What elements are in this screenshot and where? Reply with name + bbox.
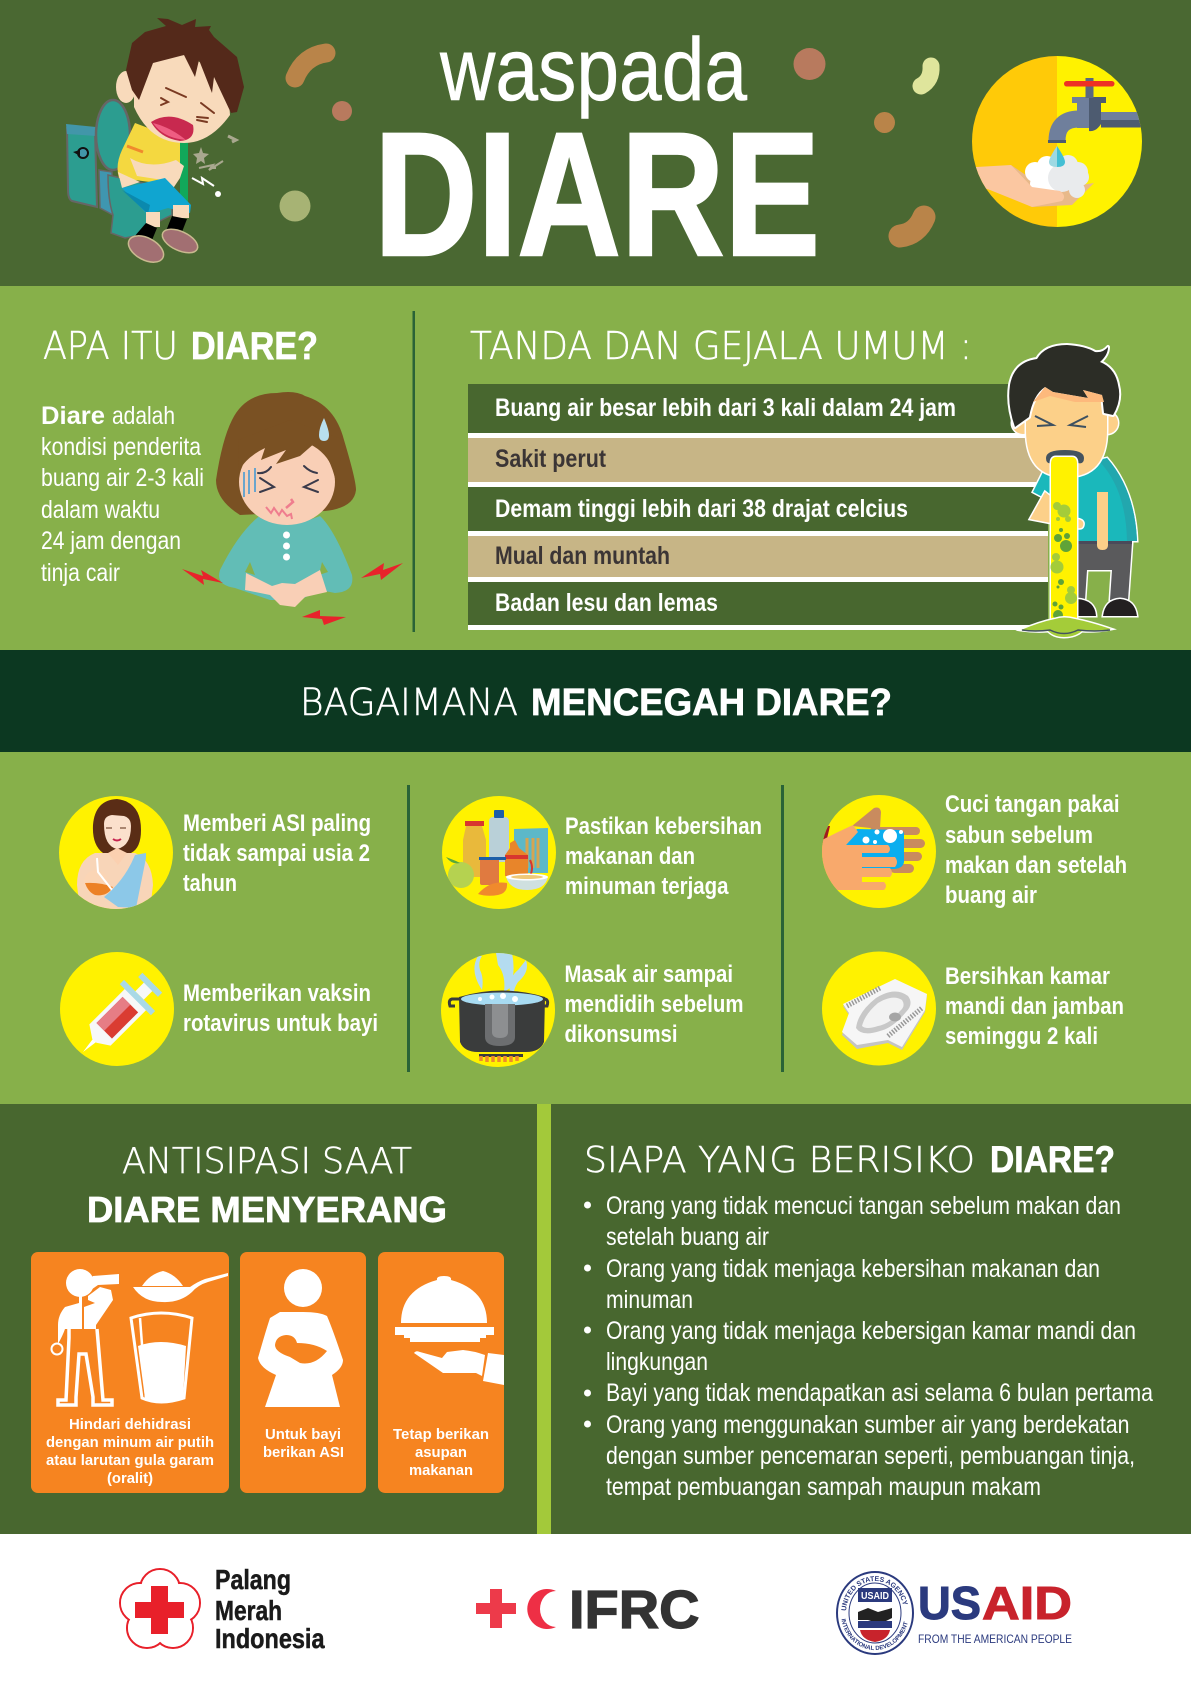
text: tetap berikan: [393, 1427, 489, 1479]
logo: usaid: USAID: [861, 1591, 889, 1602]
icon: washing hands: [818, 795, 936, 908]
icon: syringe: [60, 952, 174, 1068]
heading: apa itu diare: DIARE?: [191, 325, 318, 368]
text: hindari dehidrasi: dengan minum air putih: [46, 1435, 214, 1451]
title: DIARE: DIARE: [374, 97, 820, 293]
logo: usaid: FROM THE AMERICAN PEOPLE: [918, 1632, 1072, 1646]
list: risk groups: lingkungan: [606, 1348, 708, 1376]
icon: person drinking: [52, 1269, 119, 1405]
icon: serving cloche: [395, 1276, 504, 1385]
logo: ifrc: [476, 1580, 700, 1640]
text: cuci tangan: sabun sebelum: [945, 822, 1093, 849]
text: memberi asi: [183, 810, 371, 897]
icon: pale bean: [921, 66, 931, 86]
icon: brown bean left: [295, 53, 326, 78]
list: risk groups: minuman: [606, 1286, 693, 1314]
icon: brown bean right: [900, 217, 924, 236]
text: kebersihan makanan: Pastikan kebersihan: [565, 813, 762, 840]
text: masak air: mendidih sebelum: [564, 991, 744, 1018]
icon: spoon with sugar: [133, 1271, 228, 1302]
column divider left: [407, 785, 410, 1072]
list: risk groups: tempat pembuangan sampah maupun makam: [606, 1473, 1041, 1501]
symptom row 2: Sakit perut: [495, 445, 607, 473]
stripe: [537, 1104, 551, 1534]
text: hindari dehidrasi: atau larutan gula garam: [46, 1453, 214, 1469]
text: vaksin: [183, 980, 378, 1037]
icon: squat toilet: [822, 952, 936, 1066]
text block: definition: tinja cair: [41, 559, 120, 587]
logo: palang merah indonesia: Palang: [215, 1564, 291, 1595]
logo: usaid: [836, 1571, 1072, 1655]
text block: definition: buang air 2-3 kali: [41, 464, 204, 492]
icon: faucet and washing hand: [960, 54, 1144, 229]
list: risk groups: [584, 1192, 1153, 1501]
text: cuci tangan: buang air: [945, 882, 1037, 909]
symptom row 1: Buang air besar lebih dari 3 kali dalam 24 jam: [495, 394, 956, 422]
symptom row 1: [468, 384, 1028, 433]
icon: dot brown: [874, 112, 895, 133]
logo: usaid: UNITED STATES AGENCY: [841, 1576, 908, 1610]
symptom row 3: [468, 487, 1048, 531]
heading: diare menyerang: DIARE MENYERANG: [87, 1189, 447, 1230]
heading: bagaimana mencegah diare: MENCEGAH DIARE?: [531, 682, 892, 724]
text block: definition: adalah: [112, 402, 175, 430]
symptom list: [468, 384, 1048, 630]
panel: footer logos: [119, 1564, 1072, 1655]
text: hindari dehidrasi: Hindari dehidrasi: [69, 1417, 191, 1433]
icon: food and drinks: [442, 796, 556, 909]
icon: vomiting man: [1009, 345, 1137, 637]
panel: header: [0, 0, 1191, 293]
icon: glass of water: [131, 1313, 192, 1402]
logo: usaid: AID: [982, 1577, 1072, 1629]
icon: girl with stomach ache: [182, 392, 403, 625]
panel: definition and symptoms: [0, 286, 1191, 650]
symptom row 4: [468, 536, 1048, 577]
text block: definition: Diare: [41, 402, 105, 430]
text: untuk bayi: Untuk bayi: [265, 1427, 341, 1443]
heading: siapa yang berisiko: DIARE?: [990, 1139, 1115, 1180]
symptom row 5: [468, 582, 1048, 625]
text block: definition: kondisi penderita: [41, 433, 201, 461]
heading: bagaimana mencegah diare: [300, 681, 892, 724]
heading: tanda dan gejala: TANDA DAN GEJALA UMUM :: [470, 324, 972, 368]
divider: [412, 311, 415, 632]
text: hindari dehidrasi: (oralit): [107, 1471, 153, 1487]
icon: dot terracotta large: [794, 48, 826, 80]
text block: definition: [41, 402, 204, 587]
icon: breastfeeding mother: [59, 796, 173, 910]
text: tetap berikan: Tetap berikan: [393, 1427, 489, 1443]
text: bersihkan kamar mandi: seminggu 2 kali: [945, 1023, 1098, 1050]
text: masak air: dikonsumsi: [564, 1021, 678, 1048]
text: cuci tangan: makan dan setelah: [945, 852, 1127, 879]
icon: boiling pot: [441, 953, 555, 1067]
list: risk groups: Orang yang tidak menjaga kebersihan makanan dan: [606, 1255, 1100, 1283]
icon: dot olive: [280, 190, 310, 222]
symptom row 5: Badan lesu dan lemas: [495, 589, 718, 617]
text: hindari dehidrasi: [46, 1417, 214, 1487]
column divider right: [781, 785, 784, 1072]
text: memberi asi: tahun: [183, 870, 237, 897]
text: bersihkan kamar mandi: Bersihkan kamar: [945, 963, 1110, 990]
symptom row 3: Demam tinggi lebih dari 38 drajat celcius: [495, 495, 908, 523]
text: masak air: Masak air sampai: [564, 961, 733, 988]
logo: usaid: US: [918, 1577, 981, 1629]
text: tetap berikan: asupan: [415, 1445, 467, 1461]
heading: apa itu diare: [43, 324, 318, 368]
text: kebersihan makanan: makanan dan: [565, 843, 695, 870]
panel: who is at risk: [551, 1104, 1191, 1534]
icon: boy on toilet: [66, 18, 244, 268]
heading: bagaimana mencegah diare: BAGAIMANA: [300, 681, 518, 724]
text block: definition: dalam waktu: [41, 496, 160, 524]
icon: dot terracotta: [332, 101, 352, 121]
panel: anticipation: [0, 1104, 537, 1534]
text: untuk bayi: berikan ASI: [263, 1445, 344, 1461]
text: vaksin: Memberikan vaksin: [183, 980, 371, 1007]
logo: usaid: INTERNATIONAL DEVELOPMENT: [842, 1618, 908, 1650]
text: cuci tangan: [945, 791, 1127, 909]
text block: definition: 24 jam dengan: [41, 527, 181, 555]
icon: mother and baby: [258, 1269, 343, 1407]
symptom row 4: Mual dan muntah: [495, 542, 670, 570]
logo: palang merah indonesia: Merah: [215, 1595, 282, 1626]
text: vaksin: rotavirus untuk bayi: [183, 1010, 378, 1037]
symptom row 2: [468, 438, 1048, 482]
text: memberi asi: Memberi ASI paling: [183, 810, 371, 837]
text: masak air: [564, 961, 744, 1048]
panel: prevention title bar: [0, 650, 1191, 752]
heading: siapa yang berisiko: SIAPA YANG BERISIKO: [584, 1140, 975, 1181]
card: berikan asi: [240, 1252, 366, 1493]
text: untuk bayi: [263, 1427, 344, 1461]
heading: apa itu diare: APA ITU: [43, 324, 178, 368]
panel: prevention items: [0, 752, 1191, 1104]
list: risk groups: setelah buang air: [606, 1223, 769, 1251]
logo: palang merah indonesia: [120, 1564, 325, 1654]
text: kebersihan makanan: minuman terjaga: [565, 873, 729, 900]
title: waspada: waspada: [439, 19, 747, 119]
logo: ifrc: IFRC: [569, 1580, 700, 1640]
heading: antisipasi saat: ANTISIPASI SAAT: [122, 1141, 412, 1182]
text: tetap berikan: makanan: [409, 1463, 473, 1479]
logo: palang merah indonesia: Indonesia: [215, 1623, 325, 1654]
card: asupan makanan: [378, 1252, 504, 1493]
text: kebersihan makanan: [565, 813, 762, 900]
text: cuci tangan: Cuci tangan pakai: [945, 791, 1120, 818]
text: memberi asi: tidak sampai usia 2: [183, 840, 370, 867]
text: bersihkan kamar mandi: mandi dan jamban: [945, 993, 1124, 1020]
text: bersihkan kamar mandi: [945, 963, 1124, 1050]
card: hindari dehidrasi: [31, 1252, 229, 1493]
